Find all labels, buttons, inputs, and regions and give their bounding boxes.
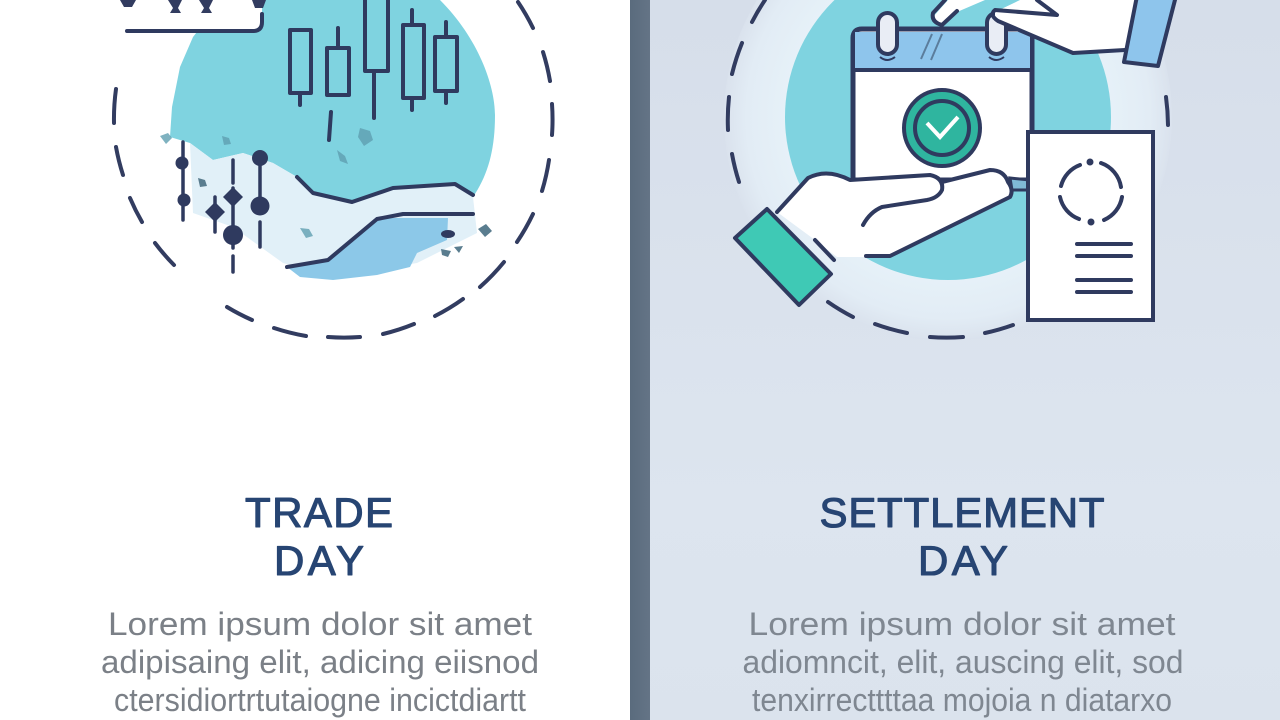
body text: settlement day: tenxirrecttttaa mojoia n diatarxo bbox=[752, 682, 1172, 718]
upper hand with sleeve bbox=[933, 0, 1176, 66]
dashed circle bbox=[728, 0, 1168, 338]
heading: trade day: DAY bbox=[274, 537, 364, 584]
blue wave area bbox=[287, 218, 448, 280]
teal circle bbox=[785, 0, 1111, 280]
dashed circle bbox=[114, 2, 553, 338]
heading: settlement day: DAY bbox=[918, 537, 1008, 584]
document ring bbox=[1060, 158, 1122, 226]
document lines bbox=[1077, 244, 1131, 292]
illustration: calendar, hands and document bbox=[724, 0, 1176, 341]
heading: trade day bbox=[245, 489, 393, 584]
teal blob bbox=[170, 0, 495, 202]
check badge bbox=[904, 90, 980, 166]
top-left frame with pins bbox=[110, 0, 266, 31]
calendar bbox=[853, 13, 1032, 180]
market curves bbox=[287, 177, 473, 267]
divider bar bbox=[630, 0, 650, 720]
body text: trade day: Lorem ipsum dolor sit amet bbox=[108, 606, 532, 642]
body text: trade day: adipisaing elit, adicing eiisnod bbox=[101, 644, 539, 680]
pale blue wash bbox=[190, 143, 477, 277]
body text: settlement day: Lorem ipsum dolor sit amet bbox=[748, 606, 1176, 642]
body text: trade day bbox=[101, 606, 539, 718]
document card bbox=[1028, 132, 1153, 320]
lower hand with cuff bbox=[735, 170, 1030, 305]
panel: trade day bbox=[0, 0, 630, 720]
heading: trade day: TRADE bbox=[245, 489, 393, 536]
panel: settlement day bbox=[650, 0, 1280, 720]
illustration: market chart in dashed circle bbox=[110, 0, 553, 338]
heading: settlement day bbox=[820, 489, 1104, 584]
body text: settlement day: adiomncit, elit, auscing elit, sod bbox=[742, 644, 1184, 680]
dot and line indicators bbox=[176, 142, 270, 272]
candlestick chart bbox=[290, 0, 457, 140]
heading: settlement day: SETTLEMENT bbox=[820, 489, 1104, 536]
pale halo bbox=[724, 0, 1172, 341]
body text: trade day: ctersidiortrtutaiogne incictdiartt bbox=[114, 682, 526, 718]
scattered specks bbox=[160, 128, 492, 257]
body text: settlement day bbox=[742, 606, 1184, 718]
